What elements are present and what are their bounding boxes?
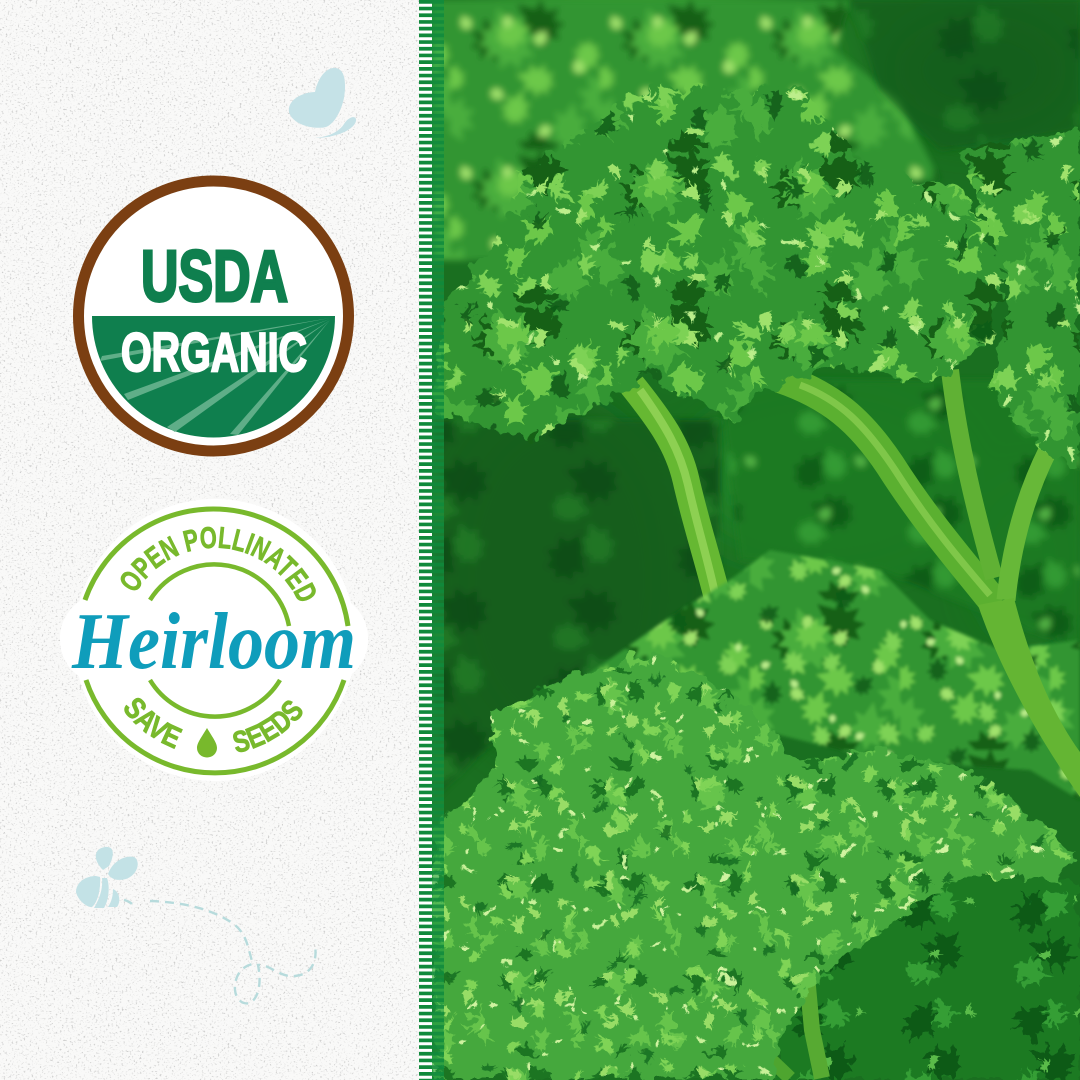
field rays — [100, 318, 330, 435]
heading USDA: USDA — [141, 237, 288, 317]
lower parsley cluster — [432, 650, 1075, 1080]
script word Heirloom: Heirloom — [71, 598, 356, 686]
text: open pollinated: OPEN POLLINATED — [120, 526, 316, 602]
out of focus leaves centre — [720, 380, 1080, 650]
blurred dark foliage background — [450, 0, 1070, 750]
upper background leaves — [432, 0, 940, 260]
bee flight dashed trail — [124, 900, 316, 1003]
green field semicircle — [92, 316, 335, 438]
stem left highlight — [640, 390, 716, 598]
badge: USDA Organic — [78, 181, 348, 451]
icon: butterfly — [289, 68, 356, 138]
text: save: SAVE — [124, 698, 183, 750]
dark upper right background — [850, 0, 1080, 150]
parsley photograph — [432, 0, 1080, 1080]
striped green border — [419, 0, 444, 1080]
white sticker backing — [60, 499, 368, 781]
main upper parsley cluster — [432, 85, 1005, 440]
photo base colour — [432, 0, 1080, 1080]
icon: seed drop — [197, 728, 217, 758]
stems of lower parsley — [745, 965, 822, 1078]
stems of upper parsley — [780, 370, 1048, 605]
lower right dark foliage — [780, 870, 1080, 1080]
stem left — [632, 385, 718, 600]
fabric background panel — [0, 0, 420, 1080]
right parsley cluster — [960, 130, 1080, 470]
out of focus dark leaves left — [432, 420, 720, 800]
brown ring and white disc — [78, 181, 348, 451]
outer green arcs — [85, 509, 348, 773]
main lower stem — [978, 598, 1080, 797]
middle parsley cluster — [580, 550, 1080, 800]
badge: Heirloom — [60, 499, 368, 781]
text: seeds: SEEDS — [233, 700, 303, 752]
icon: bee — [76, 847, 138, 908]
inner green arcs — [150, 564, 289, 717]
heading ORGANIC: ORGANIC — [121, 321, 307, 383]
